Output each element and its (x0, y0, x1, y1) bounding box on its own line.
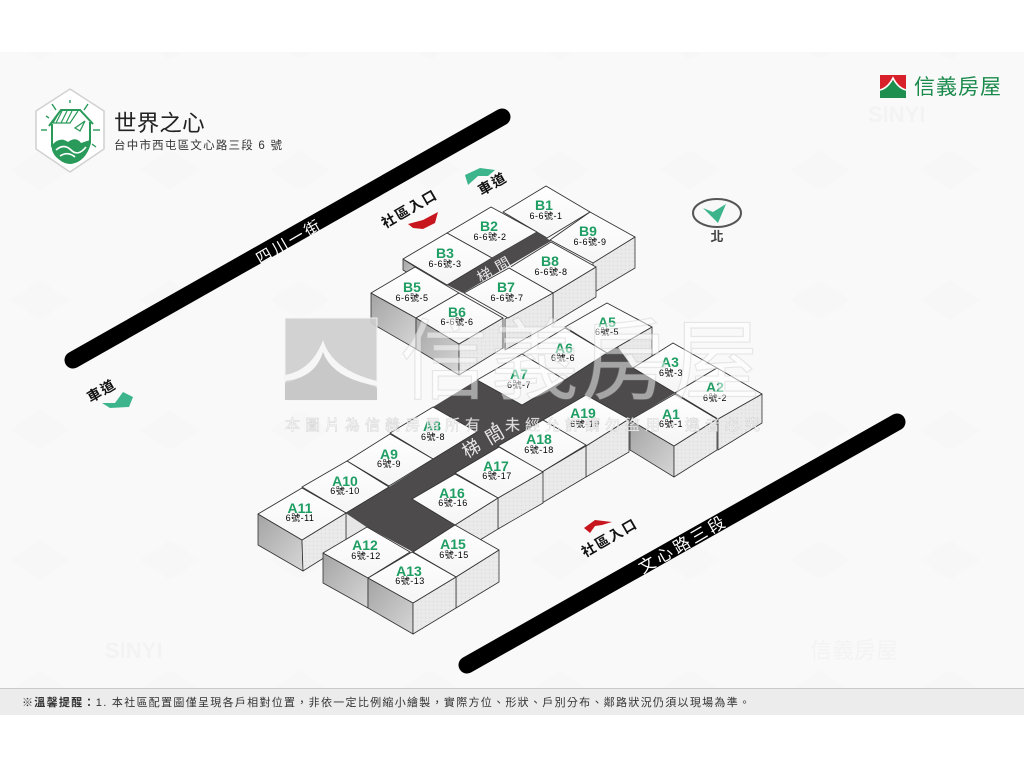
unit B7: B7 (497, 279, 515, 295)
ghost watermark text: SINYI (868, 102, 925, 127)
unit B7: 6-6號-7 (490, 292, 524, 303)
unit B5: 6-6號-5 (395, 292, 429, 303)
project address: 台中市西屯區文心路三段 6 號 (114, 138, 282, 152)
driveway label and arrow: top: 車道 (475, 169, 510, 198)
stairwell A label: 梯間 (459, 418, 515, 462)
unit B9: B9 (579, 223, 597, 239)
unit A9 (347, 434, 433, 486)
unit A9: 6號-9 (377, 458, 401, 469)
unit A1: 6號-1 (659, 418, 683, 429)
community entrance: bottom: 社區入口 (579, 515, 640, 560)
community entrance: top: 社區入口 (379, 186, 440, 231)
driveway label and arrow: left: 車道 (84, 376, 119, 405)
unit A2 (675, 368, 762, 450)
unit A3: 6號-3 (659, 367, 683, 378)
unit A16: A16 (439, 485, 465, 501)
watermark brand text: 信義房屋 (400, 312, 760, 411)
north compass: 北 (710, 229, 724, 244)
unit B6: 6-6號-6 (440, 316, 474, 327)
unit A18: A18 (526, 431, 552, 447)
unit A13: A13 (396, 563, 422, 579)
unit A7: 6號-7 (507, 379, 531, 390)
unit A13: 6號-13 (395, 575, 425, 586)
unit A11: 6號-11 (286, 512, 314, 523)
unit A6: 6號-6 (551, 352, 575, 363)
unit B1: 6-6號-1 (529, 210, 563, 221)
north compass (693, 199, 741, 244)
unit B8 (509, 242, 596, 323)
unit B7 (464, 268, 553, 350)
unit A12: A12 (352, 537, 378, 553)
unit A5: A5 (598, 314, 616, 330)
unit A12 (323, 527, 410, 608)
unit B2: B2 (480, 218, 498, 234)
unit B6 (416, 293, 503, 375)
unit A11 (258, 488, 367, 571)
unit A10: 6號-10 (330, 485, 360, 496)
unit A10: A10 (332, 473, 358, 489)
unit A15: 6號-15 (439, 549, 469, 560)
unit A17: A17 (483, 458, 509, 474)
unit A7: A7 (510, 366, 528, 382)
unit A6: A6 (555, 340, 573, 356)
unit B3 (403, 233, 492, 285)
unit B9: 6-6號-9 (573, 236, 607, 247)
unit B5 (371, 267, 459, 349)
watermark logo (285, 318, 377, 400)
unit A18: 6號-18 (524, 444, 554, 455)
brand logo: Sinyi: 信義房屋 (914, 76, 1001, 99)
unit A3 (633, 343, 717, 393)
unit A19 (543, 395, 629, 477)
unit A8 (390, 407, 477, 459)
unit B2 (447, 207, 537, 258)
unit B2: 6-6號-2 (473, 231, 507, 242)
building block A (258, 303, 762, 634)
unit A10 (302, 461, 389, 513)
stairwell B: 梯間 (474, 251, 519, 287)
project title: 世界之心 (114, 111, 205, 136)
unit A12: 6號-12 (351, 550, 381, 561)
unit A18 (498, 420, 586, 503)
watermark copyright: 本圖片為信義房屋所有，未經允許請勿盜用，違者必究 (285, 417, 760, 434)
ghost watermark text: SINYI (105, 638, 162, 663)
unit A16 (412, 474, 498, 546)
unit A5: 6號-5 (595, 326, 619, 337)
unit A13 (368, 552, 456, 634)
unit A2: A2 (706, 379, 724, 395)
unit A2: 6號-2 (703, 392, 727, 403)
footer notice (0, 688, 1024, 715)
driveway label and arrow: left (84, 376, 133, 408)
building block B (371, 186, 635, 375)
unit A19: 6號-19 (570, 418, 600, 429)
road: 四川一街: 四川一街 (253, 215, 326, 268)
unit A15 (413, 525, 499, 608)
unit B1 (503, 186, 590, 238)
unit A11: A11 (288, 500, 313, 516)
stairwell B (447, 232, 551, 293)
unit A17 (455, 447, 543, 529)
unit A6 (522, 328, 607, 380)
ghost watermark text: 信義房屋 (810, 638, 898, 663)
unit B3: 6-6號-3 (428, 258, 462, 269)
corridor A (342, 347, 675, 552)
unit A15: A15 (440, 536, 466, 552)
road: 文心路三段: 文心路三段 (635, 511, 731, 577)
unit A5 wall (607, 327, 652, 368)
unit B6: B6 (448, 304, 466, 320)
unit B9 (550, 212, 635, 293)
brand logo: Sinyi (880, 75, 1001, 99)
unit B8: B8 (541, 253, 559, 269)
unit A1: A1 (662, 406, 680, 422)
unit A9: A9 (380, 446, 398, 462)
road: 文心路三段 (467, 422, 897, 665)
unit B3: B3 (436, 245, 454, 261)
unit B5: B5 (403, 279, 421, 295)
unit A8: 6號-8 (421, 431, 445, 442)
unit A5 (565, 303, 652, 353)
ghost watermark text (105, 102, 925, 663)
unit A16: 6號-16 (438, 497, 468, 508)
central watermark (285, 312, 760, 434)
unit A3: A3 (661, 354, 679, 370)
unit B8: 6-6號-8 (534, 266, 568, 277)
unit A17: 6號-17 (482, 470, 512, 481)
unit A19: A19 (570, 405, 596, 421)
unit B1: B1 (535, 197, 553, 213)
road: 四川一街 (73, 117, 502, 360)
footer notice: ※溫馨提醒：1. 本社區配置圖僅呈現各戶相對位置，非依一定比例縮小繪製，實際方位、形狀、戶別分布、鄰路狀況仍須以現場為準。 (22, 695, 750, 709)
unit A7 (477, 354, 565, 405)
unit A1 (630, 394, 717, 477)
unit A8: A8 (423, 418, 441, 434)
project logo: hexagon house (36, 89, 104, 172)
